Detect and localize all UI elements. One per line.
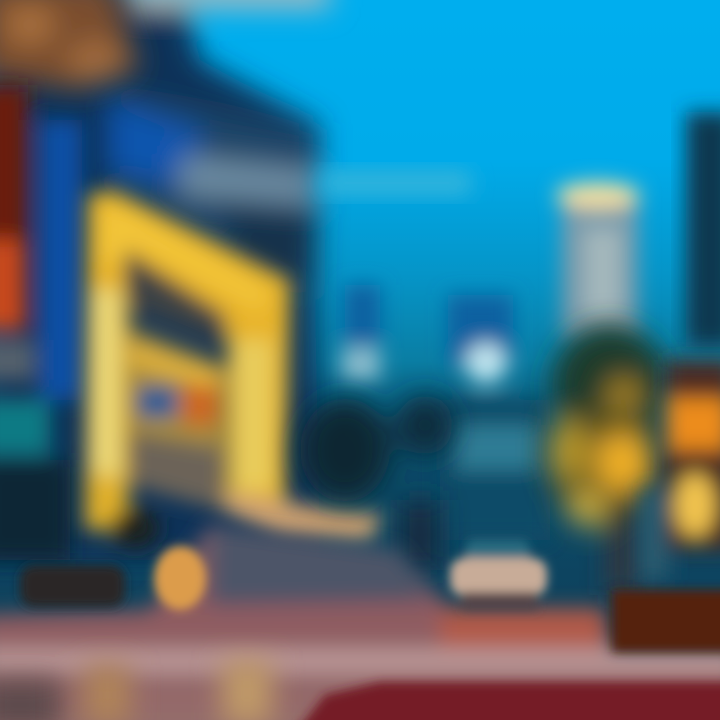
dark street trees bbox=[300, 395, 453, 570]
top left roof overhang bbox=[0, 0, 140, 90]
distant skyline towers bbox=[342, 285, 550, 540]
left red and blue columns bbox=[0, 85, 82, 560]
orange building at right bbox=[640, 360, 720, 580]
dark red foreground planter bbox=[612, 590, 720, 652]
central tower bbox=[556, 182, 640, 340]
wet pavement reflections bbox=[0, 660, 272, 720]
road and sidewalk bbox=[0, 525, 720, 720]
dark red foreground shape bbox=[290, 682, 720, 720]
yellow arch building bbox=[85, 190, 385, 548]
pale cloud band bbox=[322, 170, 472, 196]
left building mass bbox=[0, 0, 330, 560]
far right dark tower bbox=[686, 112, 720, 347]
palm tree with warm lights bbox=[548, 325, 668, 595]
car and lamp glow bbox=[20, 540, 547, 610]
